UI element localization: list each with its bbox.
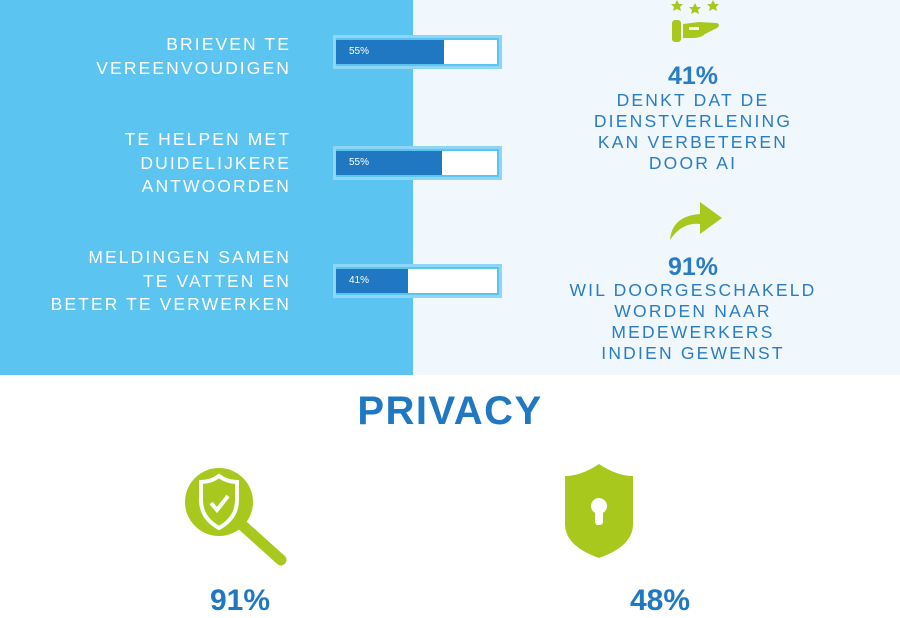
text: meldingen: BETER TE VERWERKEN [51, 294, 291, 314]
text: doorgeschakeld: MEDEWERKERS [611, 322, 775, 342]
text: helpen [125, 129, 291, 196]
icon: hand with stars [671, 0, 719, 42]
bar: 55% [333, 35, 502, 69]
text: dienstverlening: DENKT DAT DE [617, 90, 769, 110]
text: doorgeschakeld [569, 280, 817, 363]
heading: privacy: PRIVACY [357, 389, 543, 433]
panel: right light [413, 0, 900, 375]
bar: 55% second [333, 146, 502, 180]
icon: magnifier shield [185, 468, 286, 566]
text: meldingen: MELDINGEN SAMEN [88, 247, 291, 267]
text: meldingen: TE VATTEN EN [143, 270, 291, 290]
stat: 91% privacy: 91% [210, 584, 270, 617]
text: doorgeschakeld: WIL DOORGESCHAKELD [569, 280, 817, 300]
bar: 55%: 55% [349, 46, 369, 57]
text: dienstverlening: KAN VERBETEREN [598, 132, 788, 152]
bar: 41% [333, 264, 502, 298]
text: helpen: ANTWOORDEN [142, 176, 291, 196]
stat: 41%: 41% [668, 62, 718, 90]
text: helpen: TE HELPEN MET [125, 129, 291, 149]
text: dienstverlening [594, 90, 792, 173]
text: brieven: VEREENVOUDIGEN [96, 58, 291, 78]
icon: lock shield [565, 464, 633, 558]
stat: 48% privacy: 48% [630, 584, 690, 617]
bar: 55% second: 55% [349, 157, 369, 168]
icon: arrow [670, 202, 722, 240]
text: doorgeschakeld: WORDEN NAAR [614, 301, 772, 321]
text: dienstverlening: DOOR AI [649, 153, 737, 173]
bar: 41%: 41% [349, 275, 369, 286]
panel: left blue [0, 0, 413, 375]
stat: 91%: 91% [668, 253, 718, 281]
text: brieven [96, 34, 291, 78]
text: meldingen [51, 247, 291, 314]
text: helpen: DUIDELIJKERE [140, 152, 291, 172]
text: dienstverlening: DIENSTVERLENING [594, 111, 792, 131]
text: doorgeschakeld: INDIEN GEWENST [601, 343, 785, 363]
text: brieven: BRIEVEN TE [166, 34, 291, 54]
